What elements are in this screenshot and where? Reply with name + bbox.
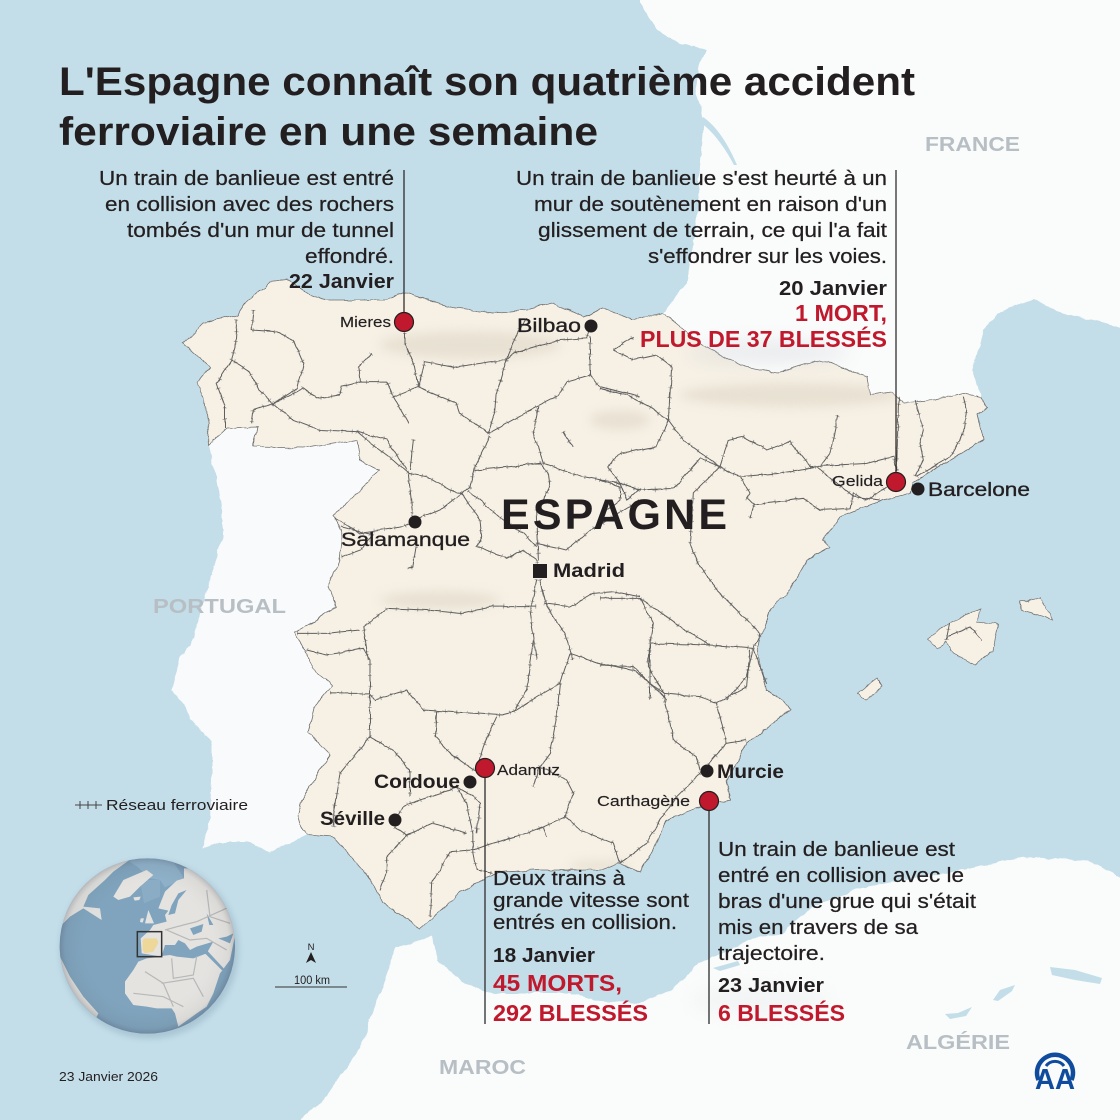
- callout: 20 Janvier: glissement de terrain, ce qui l'a fait: [538, 220, 887, 242]
- marker: Salamanque: [341, 516, 470, 551]
- callout: 18 Janvier: grande vitesse sont: [493, 890, 690, 912]
- leader line: Gelida: [895, 170, 897, 482]
- lakes and estuary: [700, 117, 1102, 1019]
- leader line: Adamuz: [484, 768, 486, 1024]
- marker: Adamuz: Adamuz: [497, 763, 560, 779]
- north arrow: N: [308, 942, 315, 953]
- callout: 18 Janvier: Deux trains à: [493, 868, 626, 890]
- scale bar: 100 km: [294, 975, 330, 987]
- terrain shading: [382, 330, 899, 870]
- country label: Algérie: ALGÉRIE: [906, 1031, 1010, 1054]
- leader line: Mieres: [403, 170, 405, 322]
- marker: Madrid: [533, 560, 625, 582]
- callout: 20 Janvier: 1 MORT,: [795, 300, 887, 326]
- north arrow: [306, 942, 316, 963]
- legend: railway network: Réseau ferroviaire: [106, 797, 248, 814]
- callout: 20 Janvier: PLUS DE 37 BLESSÉS: [640, 325, 887, 352]
- railway network: [217, 310, 982, 917]
- marker: Gelida: Gelida: [832, 474, 884, 490]
- scale bar: [275, 975, 347, 987]
- callout: 20 Janvier: Un train de banlieue s'est heurté à un: [516, 168, 887, 190]
- marker: Madrid: Madrid: [553, 560, 625, 582]
- globe locator: [55, 857, 250, 1040]
- panel: Spain: [183, 280, 988, 928]
- marker: Barcelone: Barcelone: [928, 479, 1030, 501]
- callout: 20 Janvier: [516, 168, 887, 352]
- callout: 23 Janvier: 23 Janvier: [718, 975, 824, 997]
- marker: Séville: Séville: [320, 808, 385, 830]
- country label: France: FRANCE: [925, 134, 1020, 156]
- logo: AA: AA: [1035, 1064, 1075, 1096]
- callout: 23 Janvier: [718, 839, 976, 1026]
- callout: 22 Janvier: [99, 168, 394, 293]
- marker: Carthagène: [597, 792, 718, 810]
- land: France and northern neighbours: [640, 0, 1120, 403]
- callout: 18 Janvier: 45 MORTS,: [493, 970, 622, 996]
- callout: 23 Janvier: mis en travers de sa: [718, 917, 919, 939]
- country label: Maroc: MAROC: [439, 1057, 526, 1079]
- marker: Bilbao: [517, 315, 598, 337]
- country label: Portugal: PORTUGAL: [153, 596, 286, 618]
- marker: Carthagène: Carthagène: [597, 794, 690, 810]
- callout: 23 Janvier: trajectoire.: [718, 943, 825, 965]
- marker: Salamanque: Salamanque: [341, 529, 470, 551]
- title: [59, 60, 915, 154]
- callout: 18 Janvier: [493, 868, 690, 1026]
- callout: 22 Janvier: tombés d'un mur de tunnel: [127, 220, 394, 242]
- callout: 23 Janvier: 6 BLESSÉS: [718, 999, 845, 1026]
- marker: Gelida: [832, 472, 906, 492]
- marker: Mieres: Mieres: [340, 315, 391, 331]
- panel: Portugal: [172, 427, 380, 852]
- Balearic islands: [857, 598, 1053, 700]
- marker: Murcie: Murcie: [717, 761, 784, 783]
- callout: 22 Janvier: en collision avec des rochers: [105, 194, 394, 216]
- callout: 23 Janvier: bras d'une grue qui s'était: [718, 891, 976, 913]
- callout: 20 Janvier: mur de soutènement en raison d'un: [534, 194, 887, 216]
- callout: 22 Janvier: 22 Janvier: [289, 271, 394, 293]
- country label: Espagne: ESPAGNE: [501, 491, 727, 539]
- callout: 23 Janvier: entré en collision avec le: [718, 865, 964, 887]
- date: 23 Janvier 2026: [59, 1069, 158, 1084]
- marker: Cordoue: Cordoue: [374, 771, 460, 793]
- callout: 20 Janvier: s'effondrer sur les voies.: [648, 246, 887, 268]
- callout: 18 Janvier: 18 Janvier: [493, 945, 595, 967]
- callout: 23 Janvier: Un train de banlieue est: [718, 839, 955, 861]
- title: ferroviaire en une semaine: [59, 110, 598, 154]
- callout: 18 Janvier: entrés en collision.: [493, 912, 677, 934]
- land: North Africa: [290, 857, 1120, 1120]
- leader line: Carthagène: [708, 801, 710, 1024]
- callout: 18 Janvier: 292 BLESSÉS: [493, 999, 648, 1026]
- marker: Bilbao: Bilbao: [517, 315, 581, 337]
- callout: 22 Janvier: effondré.: [305, 246, 394, 268]
- title: L'Espagne connaît son quatrième accident: [59, 60, 915, 104]
- callout: 22 Janvier: Un train de banlieue est entré: [99, 168, 394, 190]
- marker: Mieres: [340, 312, 414, 332]
- marker: Adamuz: [476, 758, 560, 779]
- callout: 20 Janvier: 20 Janvier: [779, 278, 887, 300]
